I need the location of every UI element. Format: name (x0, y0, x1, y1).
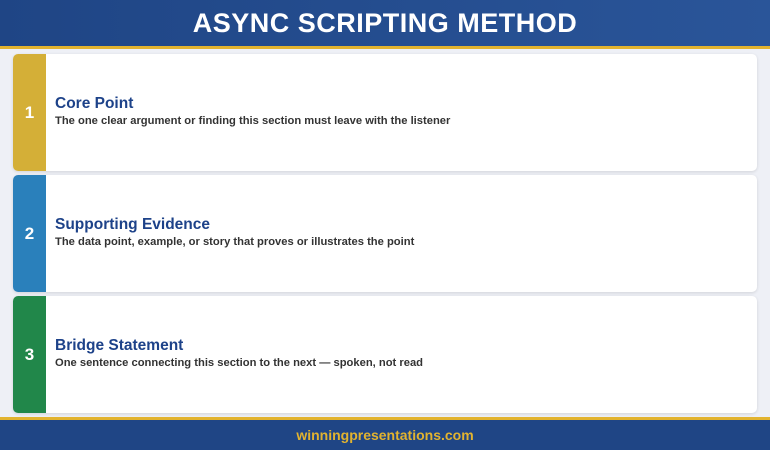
text: core point: The one clear argument or finding this section must leave with the listener (55, 115, 450, 127)
number badge 2: 2 (25, 224, 34, 242)
card 2: supporting evidence (13, 175, 757, 292)
title: ASYNC SCRIPTING METHOD (193, 8, 577, 38)
footer (0, 417, 770, 450)
number badge 2 (13, 175, 46, 292)
text: core point (55, 95, 450, 127)
footer: winningpresentations.com (296, 427, 474, 443)
card 1: core point (13, 54, 757, 171)
text: supporting evidence: Supporting Evidence (55, 216, 210, 233)
number badge 1: 1 (25, 102, 34, 122)
card 3: bridge statement (13, 296, 757, 413)
text: bridge statement: Bridge Statement (55, 337, 183, 354)
text: bridge statement: One sentence connecting this section to the next — spoken, not read (55, 357, 423, 369)
header (0, 0, 770, 49)
text: core point: Core Point (55, 95, 133, 112)
number badge 3 (13, 296, 46, 413)
text: supporting evidence: The data point, example, or story that proves or illustrates the point (55, 236, 414, 248)
text: bridge statement (55, 337, 423, 369)
number badge 1 (13, 54, 46, 171)
text: supporting evidence (55, 216, 414, 248)
number badge 3: 3 (25, 344, 34, 364)
